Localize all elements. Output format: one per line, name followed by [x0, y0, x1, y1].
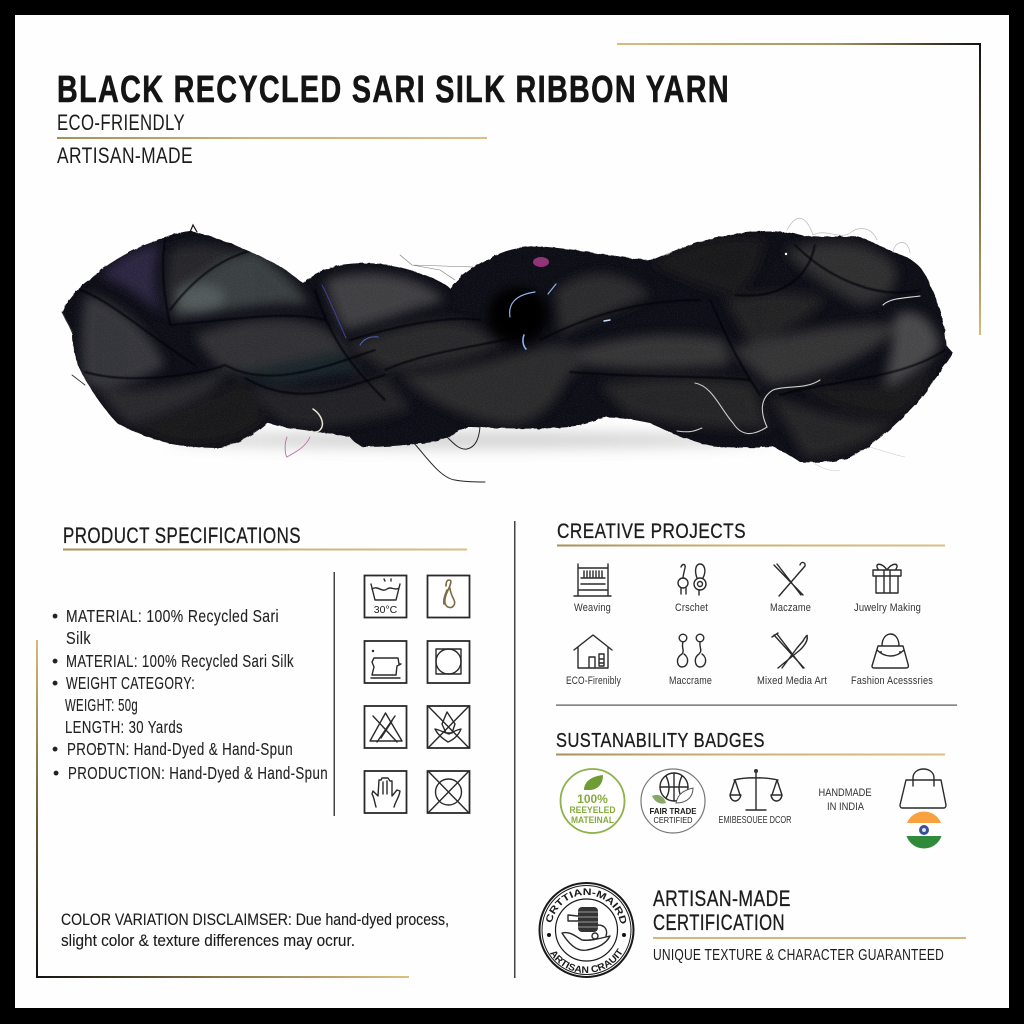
project: eco-friendly home	[566, 635, 621, 687]
specification list: WEIGHT: 50g	[65, 695, 138, 715]
heading rule	[556, 754, 945, 756]
specification list: •	[52, 606, 59, 626]
icon: wash at 30C: 30°C	[374, 604, 398, 616]
badge: recycled material: MATEINAL	[571, 815, 614, 825]
panel: sustainability badges	[556, 729, 946, 849]
care symbols grid	[364, 576, 470, 813]
icon: iron	[364, 641, 406, 683]
heading rule	[653, 937, 966, 939]
icon: no bleach	[364, 706, 406, 748]
icon: hook in box	[428, 576, 470, 618]
specification list	[52, 606, 328, 783]
icon: hand wash	[364, 771, 406, 813]
badge: balance scale: EMIBESOUEE DCOR	[718, 815, 792, 826]
loose threads	[62, 218, 920, 482]
title: BLACK RECYCLED SARI SILK RIBBON YARN	[57, 69, 730, 111]
project: jewelry making: Juwelry Making	[854, 602, 921, 614]
icon: wash at 30C	[364, 576, 406, 618]
badge: fair trade	[641, 769, 705, 833]
heading: ARTISAN-MADE	[653, 886, 791, 911]
badge: handmade in india: IN INDIA	[827, 801, 865, 813]
panel: artisan-made certification	[538, 882, 966, 978]
project: weaving	[574, 564, 611, 614]
project: mixed media art	[757, 633, 827, 687]
divider: specifications to icons	[334, 572, 335, 816]
badge: recycled material: REEYELED	[570, 805, 616, 815]
project: crochet	[675, 564, 708, 614]
specification list: MATERIAL: 100% Recycled Sari Silk	[66, 651, 294, 671]
subtitle: artisan-made: ARTISAN-MADE	[57, 143, 193, 168]
specification list: •	[52, 651, 59, 671]
icon: india flag circle	[906, 812, 942, 848]
project: macrame hooks	[669, 634, 712, 687]
project: macrame: Maczame	[770, 602, 811, 614]
project: jewelry making	[854, 564, 921, 614]
panel: creative projects	[557, 519, 945, 687]
stamp seal: ARTISAN CRAUIT	[550, 948, 622, 973]
project: fashion accessories	[851, 634, 933, 687]
specification list: WEIGHT CATEGORY:	[66, 673, 195, 693]
specification list: LENGTH: 30 Yards	[65, 717, 183, 737]
specification list: •	[52, 673, 59, 693]
heading: CREATIVE PROJECTS	[557, 519, 746, 543]
specification list: •	[52, 739, 59, 759]
badge: fair trade: FAIR TRADE	[650, 806, 697, 816]
heading rule	[63, 548, 467, 550]
specification list: PRODUCTION: Hand-Dyed & Hand-Spun	[68, 763, 328, 783]
heading rule	[557, 544, 945, 546]
heading: PRODUCT SPECIFICATIONS	[63, 523, 301, 548]
badge: recycled material: 100%	[577, 792, 608, 806]
frayed dark knot	[488, 287, 548, 343]
stamp seal	[538, 882, 634, 978]
disclaimer	[61, 911, 449, 950]
project: crochet: Crschet	[675, 602, 708, 614]
heading: SUSTANABILITY BADGES	[556, 729, 765, 752]
product photo: twisted black yarn skein	[60, 218, 960, 482]
project: macrame hooks: Maccrame	[669, 675, 712, 687]
project: mixed media art: Mixed Media Art	[757, 675, 827, 687]
specification list: •	[53, 763, 60, 783]
badge: fair trade: CERTIFIED	[654, 816, 693, 825]
heading: CERTIFICATION	[653, 910, 785, 935]
subtitle: eco-friendly: ECO-FRIENDLY	[57, 110, 185, 135]
panel: product specifications	[52, 523, 467, 950]
header block	[57, 69, 730, 168]
icon: no flame	[428, 706, 470, 748]
badge: recycled material	[560, 769, 624, 833]
stamp seal: CRTTIAN-MAIRD	[546, 888, 626, 924]
badge: handmade in india: HANDMADE	[818, 787, 872, 799]
divider: left and right columns	[514, 521, 516, 978]
decorative frame: bottom left corner	[36, 640, 409, 978]
specification list: PROÐTN: Hand-Dyed & Hand-Spun	[67, 739, 293, 759]
disclaimer: slight color & texture differences may ocrur.	[61, 932, 355, 950]
icon: handbag	[900, 769, 946, 808]
divider: projects to badges	[556, 704, 957, 706]
project: fashion accessories: Fashion Acesssries	[851, 675, 933, 687]
project: weaving: Weaving	[574, 602, 611, 614]
specification list: Silk	[66, 628, 91, 648]
decorative frame: top right corner	[617, 43, 981, 335]
heading	[653, 886, 791, 935]
badge: handmade in india	[818, 787, 872, 813]
header rule	[57, 137, 487, 139]
project: eco-friendly home: ECO-Firenibly	[566, 675, 621, 687]
badge: balance scale	[718, 769, 792, 826]
disclaimer: COLOR VARIATION DISCLAIMSER: Due hand-dyed process,	[61, 911, 449, 929]
icon: tumble dry	[428, 641, 470, 683]
icon: do not dry clean	[428, 771, 470, 813]
specification list: MATERIAL: 100% Recycled Sari	[66, 606, 279, 626]
project: macrame	[770, 562, 811, 614]
